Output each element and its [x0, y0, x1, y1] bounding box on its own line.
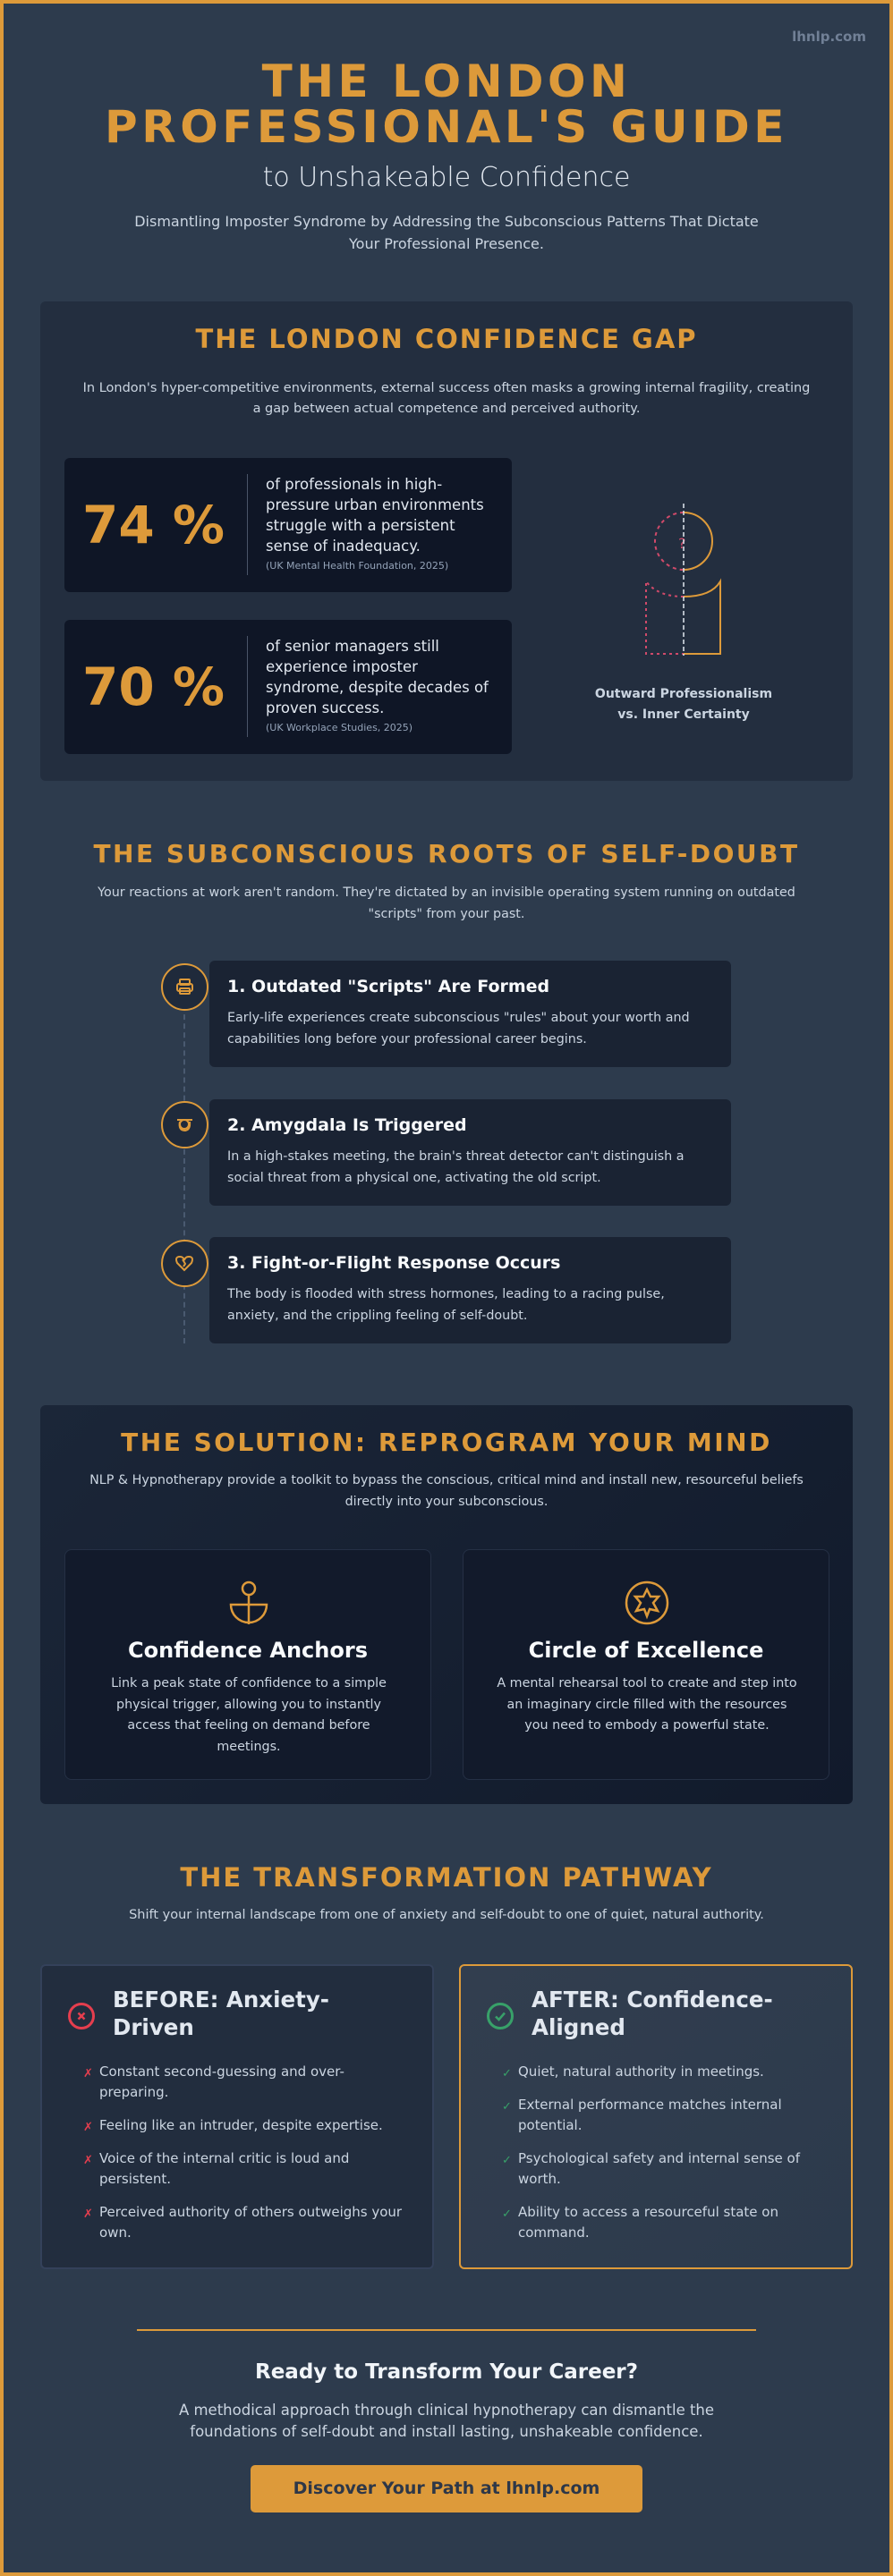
tool card: confidence anchors: Confidence Anchors	[128, 1638, 368, 1663]
card: before: Constant second-guessing and over-preparing.	[99, 2063, 344, 2100]
intro text: In London's hyper-competitive environments, external success often masks a growing internal fragility, creating	[83, 381, 810, 395]
brand: lhnlp.com: lhnlp.com	[792, 29, 866, 45]
card: before: ✗	[83, 2121, 93, 2134]
panel: confidence gap	[40, 301, 853, 781]
title: THE LONDON	[262, 55, 631, 107]
card: before	[40, 1964, 434, 2269]
step 1	[209, 961, 731, 1067]
icon: printer	[161, 963, 208, 1011]
heading: solution: THE SOLUTION: REPROGRAM YOUR MIND	[121, 1428, 772, 1457]
intro text	[83, 381, 810, 416]
title	[105, 55, 788, 153]
step 3: 3. Fight-or-Flight Response Occurs	[227, 1253, 560, 1273]
card: after: ✓	[502, 2067, 512, 2080]
tagline: Dismantling Imposter Syndrome by Addressing the Subconscious Patterns That Dictate	[134, 213, 759, 230]
card: after: Quiet, natural authority in meetings.	[518, 2063, 764, 2080]
card: after: Aligned	[532, 2014, 625, 2040]
icon: green check	[487, 2003, 514, 2029]
icon: brain	[161, 1101, 208, 1148]
tagline	[134, 213, 759, 252]
CTA text: A methodical approach through clinical hypnotherapy can dismantle the	[179, 2402, 714, 2419]
roots intro: "scripts" from your past.	[369, 907, 524, 921]
card: before: ✗	[83, 2207, 93, 2221]
figure: outward vs inner: ?	[678, 535, 685, 552]
stat card 74%: (UK Mental Health Foundation, 2025)	[266, 560, 448, 572]
card: after: Ability to access a resourceful state on command.	[518, 2204, 778, 2241]
stat card 70%: of senior managers still experience imposter syndrome, despite decades of proven success.	[266, 638, 489, 716]
card: before: Feeling like an intruder, despite expertise.	[99, 2117, 383, 2133]
figure caption: Outward Professionalism	[595, 687, 772, 701]
card: before: Voice of the internal critic is loud and persistent.	[99, 2150, 349, 2187]
card: after: AFTER: Confidence-	[532, 1987, 773, 2012]
tagline: Your Professional Presence.	[349, 235, 544, 252]
figure caption	[595, 687, 772, 722]
step 1: Early-life experiences create subconscious "rules" about your worth and capabilities long before your professional career begins.	[227, 1011, 690, 1046]
card: before: ✗	[83, 2154, 93, 2167]
timeline line	[183, 987, 185, 1343]
icon: anchor	[229, 1581, 268, 1624]
stat card 74%: of professionals in high-pressure urban environments struggle with a persistent sense of inadequacy.	[266, 476, 484, 555]
tool card: confidence anchors: Link a peak state of confidence to a simple physical trigger, allowing you to instantly access that feeling on demand before meetings.	[111, 1676, 387, 1753]
tool card: circle of excellence: Circle of Excellence	[529, 1638, 763, 1663]
step 1: 1. Outdated "Scripts" Are Formed	[227, 977, 549, 996]
CTA button	[251, 2465, 642, 2512]
tool card: confidence anchors	[64, 1549, 431, 1780]
icon: star circle	[625, 1581, 669, 1624]
stat card 70%: 70 %	[82, 657, 225, 717]
heading: transformation: THE TRANSFORMATION PATHWAY	[180, 1862, 713, 1893]
tool card: circle of excellence	[463, 1549, 829, 1780]
card: before: Perceived authority of others outweighs your own.	[99, 2204, 402, 2241]
transformation intro: Shift your internal landscape from one of anxiety and self-doubt to one of quiet, natural authority.	[129, 1908, 764, 1922]
card: after	[459, 1964, 853, 2269]
step 2	[209, 1099, 731, 1206]
title: PROFESSIONAL'S GUIDE	[105, 101, 788, 153]
CTA text: foundations of self-doubt and install lasting, unshakeable confidence.	[190, 2422, 703, 2440]
heading: subconscious roots: THE SUBCONSCIOUS ROOTS OF SELF-DOUBT	[93, 839, 800, 869]
CTA button: Discover Your Path at lhnlp.com	[293, 2479, 600, 2498]
roots intro: Your reactions at work aren't random. They're dictated by an invisible operating system running on outdated	[98, 886, 795, 900]
card: after: Psychological safety and internal sense of worth.	[518, 2150, 800, 2187]
tool card: circle of excellence: A mental rehearsal tool to create and step into an imaginary circle filled with the resources you need to embody a powerful state.	[497, 1676, 797, 1733]
card: before: ✗	[83, 2067, 93, 2080]
step 2: 2. Amygdala Is Triggered	[227, 1115, 467, 1135]
step 3: The body is flooded with stress hormones, leading to a racing pulse, anxiety, and the crippling feeling of self-doubt.	[227, 1287, 665, 1323]
card: before: BEFORE: Anxiety-	[113, 1987, 329, 2012]
figure: outward vs inner	[645, 504, 721, 656]
card: after: ✓	[502, 2100, 512, 2114]
solution intro: directly into your subconscious.	[345, 1495, 548, 1509]
divider	[137, 2329, 756, 2331]
icon: red x	[68, 2003, 95, 2029]
stat card 70%: (UK Workplace Studies, 2025)	[266, 722, 412, 733]
stat card 74%	[64, 458, 512, 592]
intro text: a gap between actual competence and perceived authority.	[253, 402, 640, 416]
CTA heading: Ready to Transform Your Career?	[255, 2360, 638, 2384]
stat card 74%: 74 %	[82, 495, 225, 555]
roots intro	[98, 886, 795, 921]
step 2: In a high-stakes meeting, the brain's threat detector can't distinguish a social threat from a physical one, activating the old script.	[227, 1149, 684, 1185]
figure caption: vs. Inner Certainty	[617, 708, 750, 722]
CTA text	[179, 2402, 714, 2440]
stat card 70%	[64, 620, 512, 754]
card: after: External performance matches internal potential.	[518, 2097, 782, 2133]
icon: heart	[161, 1240, 208, 1287]
step 3	[209, 1237, 731, 1343]
card: after: ✓	[502, 2207, 512, 2221]
solution intro	[89, 1473, 804, 1509]
subtitle: to Unshakeable Confidence	[263, 162, 630, 193]
panel: solution	[40, 1405, 853, 1804]
card: after: ✓	[502, 2154, 512, 2167]
card: before: Driven	[113, 2014, 194, 2040]
heading: confidence gap: THE LONDON CONFIDENCE GAP	[195, 324, 698, 354]
solution intro: NLP & Hypnotherapy provide a toolkit to bypass the conscious, critical mind and install new, resourceful beliefs	[89, 1473, 804, 1487]
